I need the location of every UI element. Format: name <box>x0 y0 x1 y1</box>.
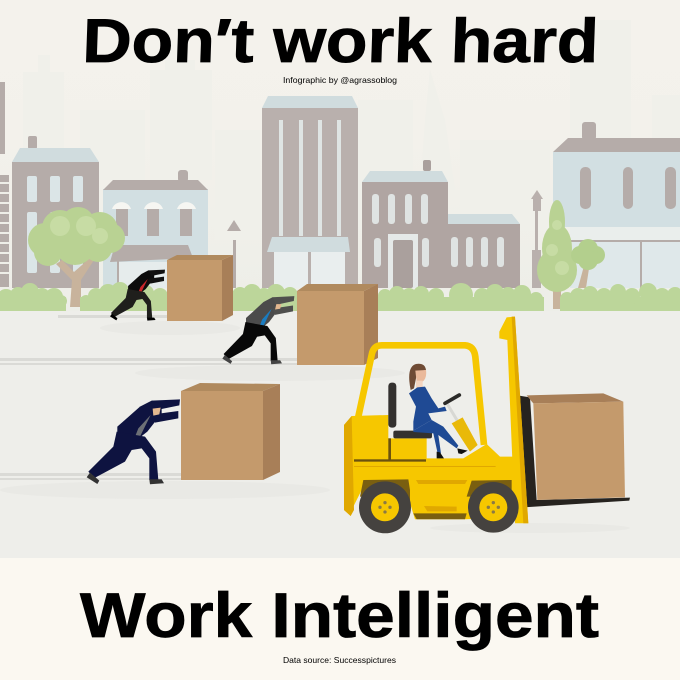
building: far left tower <box>0 82 9 287</box>
footer panel <box>0 558 680 680</box>
hedge <box>0 282 680 311</box>
data source line: Data source: Successpictures <box>283 655 396 665</box>
building: pale blue shop <box>103 170 208 288</box>
forklift wheel front <box>468 482 519 533</box>
forklift driver <box>409 364 468 458</box>
building: large blue building right <box>553 122 680 288</box>
man 3: navy suit, grey tie <box>87 399 180 484</box>
tree: small right tree <box>571 239 605 288</box>
box 3 <box>181 383 280 480</box>
forklift wheel rear <box>359 481 411 533</box>
forklift seat <box>388 383 432 438</box>
background: faint skyline <box>23 20 680 240</box>
building: grey house with blue roof <box>12 136 99 288</box>
forklift cab frame <box>358 345 484 445</box>
forklift mast <box>499 317 528 523</box>
lamp post right <box>531 190 543 288</box>
road texture lines <box>0 315 297 480</box>
building: tall columned building <box>262 96 358 288</box>
forklift load box <box>517 393 630 507</box>
tree: large left tree <box>28 207 125 307</box>
building: brick house with wing <box>362 160 520 288</box>
box 1 <box>167 255 233 321</box>
title: Don't work hard: Don′t work hard <box>81 7 600 76</box>
forklift body <box>344 415 517 519</box>
man 1: black suit, red tie <box>110 270 165 321</box>
man 2: grey jacket, blue tie <box>222 296 294 364</box>
lamp post left <box>227 220 241 288</box>
forklift <box>344 317 630 533</box>
box 2 <box>297 284 378 365</box>
ground shadows <box>0 321 630 533</box>
tree: cypress <box>537 200 577 309</box>
title: Work Intelligent: Work Intelligent <box>80 581 599 651</box>
forklift steering <box>445 395 478 452</box>
ground <box>0 311 680 558</box>
credit line: Infographic by @agrassoblog <box>283 75 397 85</box>
